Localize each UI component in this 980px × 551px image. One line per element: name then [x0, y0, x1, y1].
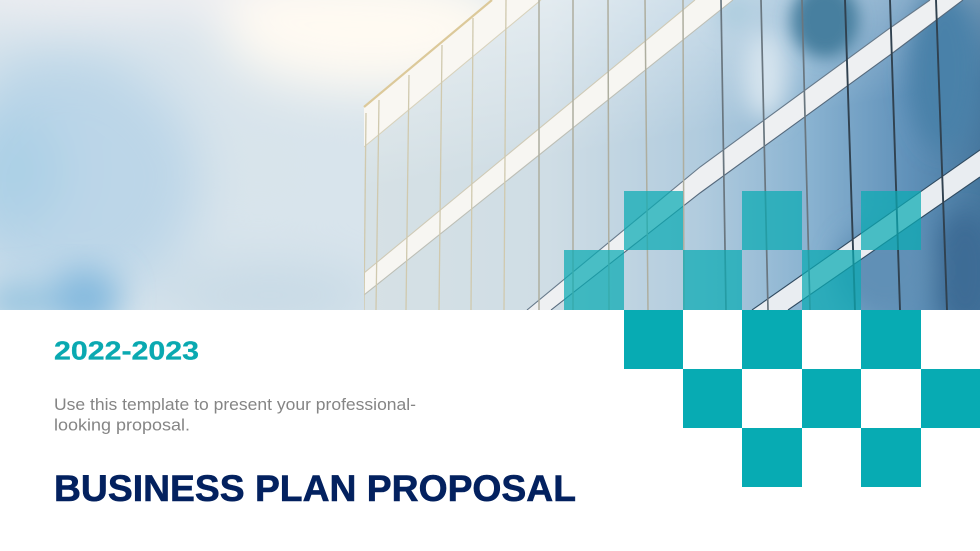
photo: building facade [364, 0, 980, 330]
photo: band edge lines [364, 0, 980, 310]
checker pattern: translucent squares over photo [564, 191, 921, 310]
year label: 2022-2023 [54, 336, 199, 366]
photo: vertical window mullions [364, 0, 947, 310]
description text [54, 396, 416, 434]
title: BUSINESS PLAN PROPOSAL [54, 467, 576, 509]
description text: Use this template to present your professional- [54, 396, 416, 414]
photo: sky [0, 0, 490, 310]
description text: looking proposal. [54, 416, 190, 434]
photo: white floor bands [364, 0, 980, 310]
photo: white roof fascia [364, 0, 541, 147]
photo: glass office building against the sky [0, 0, 980, 330]
checker pattern: solid squares [624, 310, 980, 487]
photo: roof edge [364, 0, 492, 107]
